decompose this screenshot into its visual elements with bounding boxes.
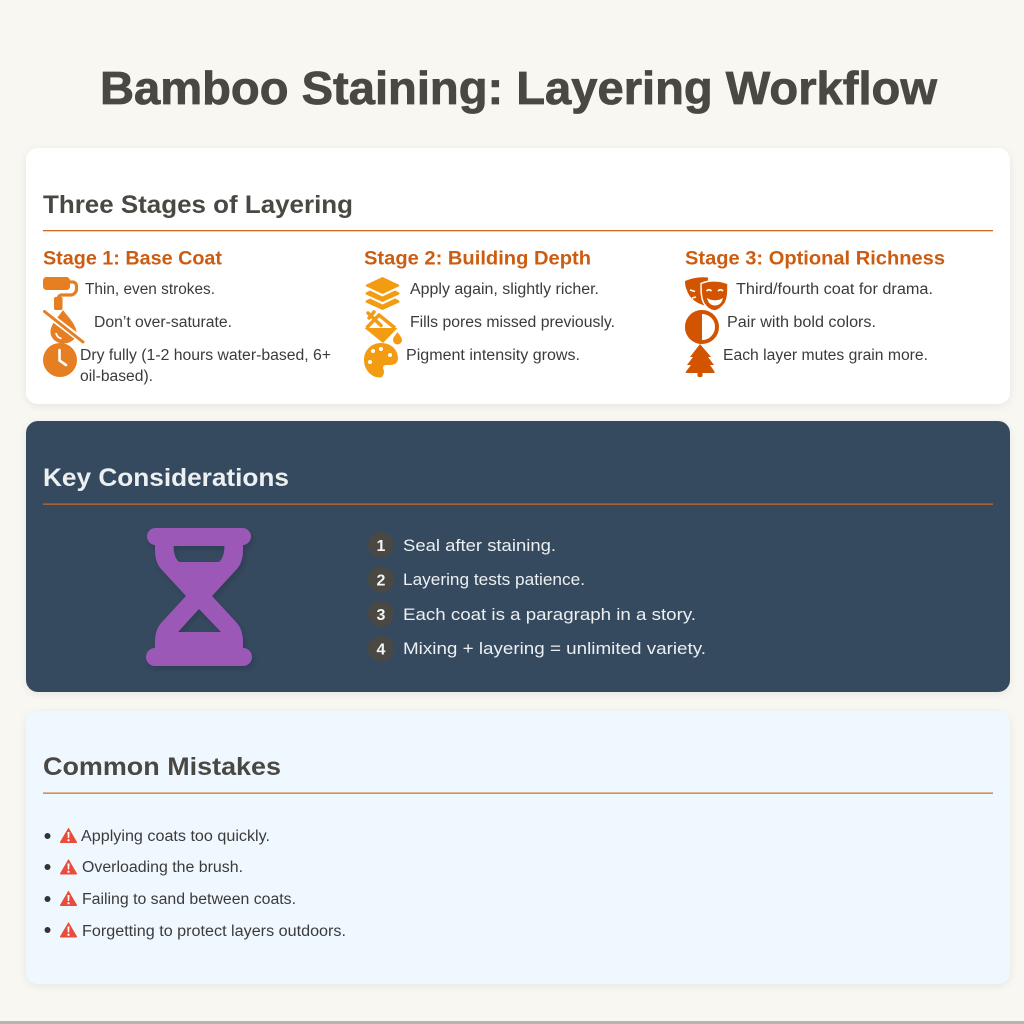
- item 3: Each coat is a paragraph in a story.: [403, 606, 696, 624]
- stage 2 column: Fills pores missed previously.: [410, 314, 615, 331]
- icon: layers: [366, 277, 400, 310]
- item 2: [368, 566, 585, 592]
- item 1: [368, 532, 556, 558]
- icon: fill drip: [364, 312, 402, 344]
- item 4: [368, 636, 706, 662]
- panel: key considerations: [26, 421, 1010, 692]
- stage 2 column: Pigment intensity grows.: [406, 347, 580, 364]
- stage 2 heading: Stage 2: Building Depth: [364, 248, 591, 270]
- item 4: 4: [377, 642, 386, 658]
- panel: common mistakes: [26, 711, 1010, 984]
- stage 3 column: [685, 248, 945, 377]
- icon: paint roller: [43, 277, 76, 310]
- stage 3 column: Pair with bold colors.: [727, 314, 876, 331]
- stage 2 text: Apply again, slightly richer.: [410, 281, 599, 298]
- stage 1 heading: Stage 1: Base Coat: [43, 248, 222, 270]
- icon: theater masks: [685, 277, 728, 311]
- stage 1 column: Don’t over-saturate.: [94, 314, 232, 331]
- stage 3 column: Each layer mutes grain more.: [723, 347, 928, 364]
- heading: three stages: Three Stages of Layering: [43, 191, 353, 219]
- mistake 2: Overloading the brush.: [82, 859, 243, 876]
- icon: crossed-out drop: [44, 310, 84, 344]
- item 4: Mixing + layering = unlimited variety.: [403, 640, 706, 658]
- stage 1 text: Thin, even strokes.: [85, 281, 215, 298]
- stage 2 column: [364, 248, 615, 378]
- title: Bamboo Staining: Layering Workflow: [100, 62, 937, 114]
- stage 1 column: [43, 248, 331, 385]
- item 3: 3: [377, 607, 386, 624]
- mistake 1: Applying coats too quickly.: [81, 828, 270, 845]
- mistake 3: Failing to sand between coats.: [82, 891, 296, 908]
- stage 3 text: Third/fourth coat for drama.: [736, 281, 933, 298]
- item 3: [368, 601, 696, 627]
- panel: three stages of layering: [26, 148, 1010, 404]
- item 1: 1: [377, 538, 386, 555]
- heading: key considerations: Key Considerations: [43, 464, 289, 492]
- icon: half circle contrast: [685, 310, 717, 344]
- stage 1 column: Dry fully (1-2 hours water-based, 6+: [80, 347, 331, 364]
- item 2: 2: [377, 572, 386, 590]
- item 1: Seal after staining.: [403, 537, 556, 555]
- item 2: Layering tests patience.: [403, 571, 585, 589]
- numbered list: [368, 532, 706, 662]
- heading: common mistakes: Common Mistakes: [43, 753, 281, 781]
- icon: hourglass: [146, 528, 252, 666]
- icon: palette: [364, 343, 398, 378]
- icon: tree: [686, 344, 715, 377]
- stage 3 heading: Stage 3: Optional Richness: [685, 248, 945, 270]
- icon: clock: [43, 343, 77, 377]
- stage 1 column: oil-based).: [80, 368, 153, 385]
- mistake 4: Forgetting to protect layers outdoors.: [82, 923, 346, 940]
